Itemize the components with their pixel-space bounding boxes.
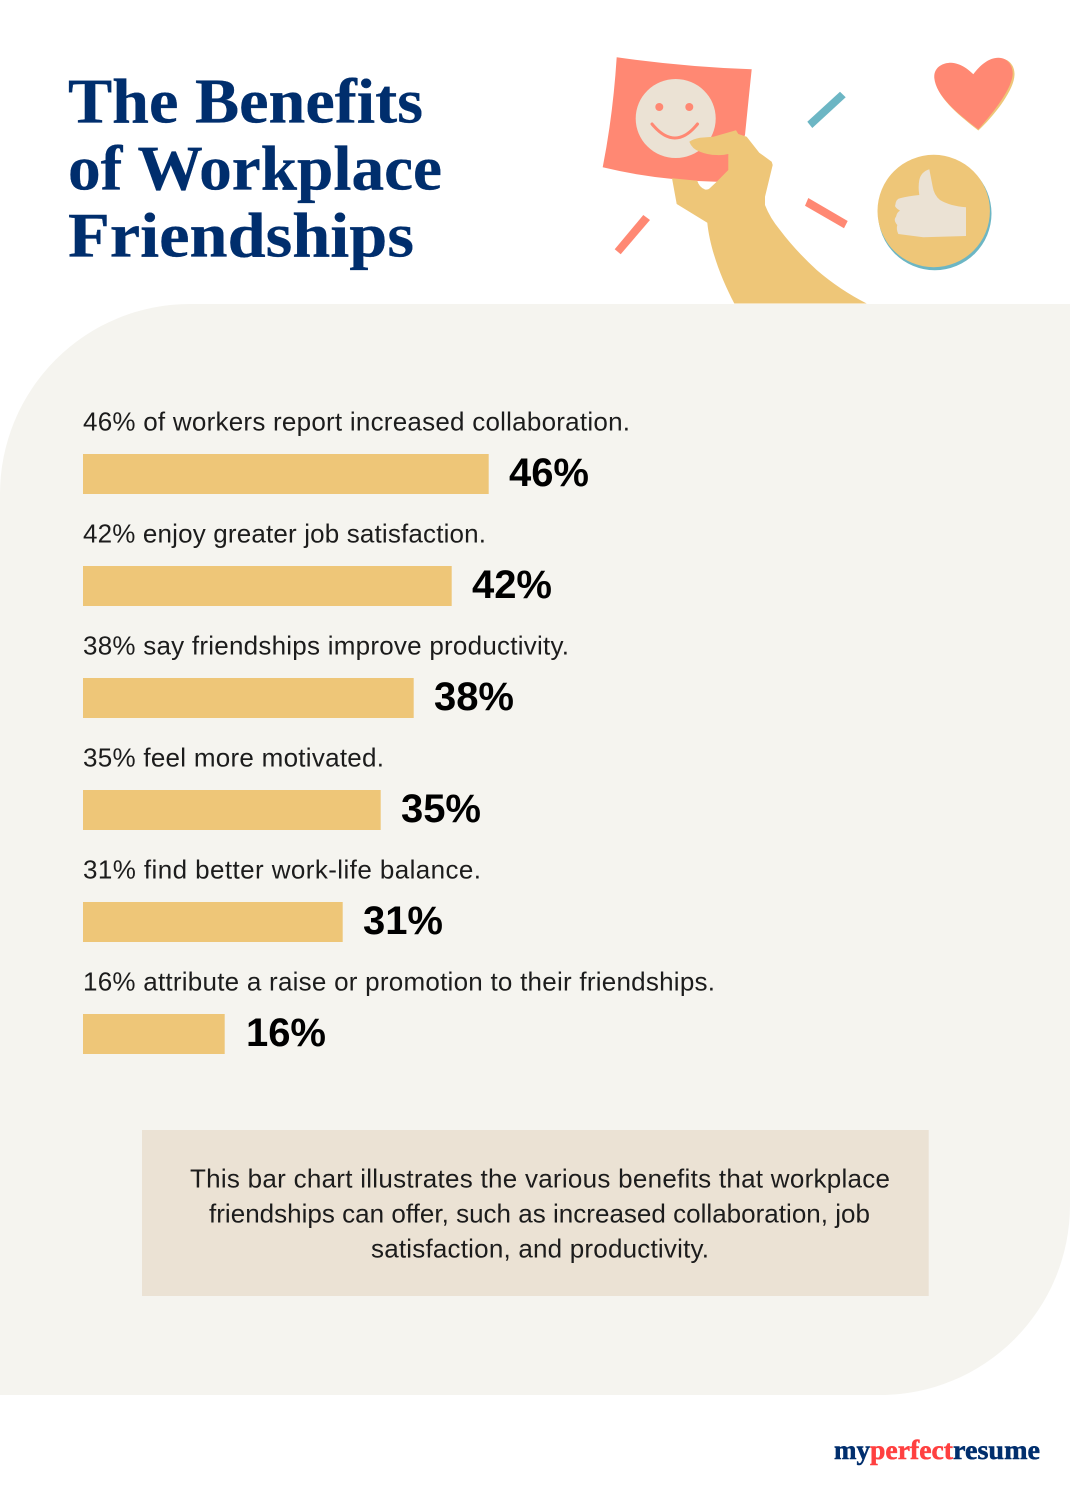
row: 16%: [83, 966, 715, 1055]
icon: hand: [672, 130, 867, 304]
title: [68, 66, 442, 270]
icon: smiley face: [636, 79, 716, 158]
row: 35%: 35%: [401, 787, 481, 831]
icon: salmon confetti right: [805, 198, 848, 228]
callout: satisfaction, and productivity.: [371, 1234, 709, 1264]
icon: thumbs up badge: [878, 155, 992, 270]
row: 42%: 42%: [472, 563, 552, 607]
row: 35%: [83, 742, 481, 831]
row: 46%: [83, 406, 630, 495]
callout: friendships can offer, such as increased collaboration, job: [209, 1198, 870, 1228]
row: 31%: 31% find better work-life balance.: [83, 854, 481, 884]
title: of Workplace: [68, 132, 442, 204]
icon: heart: [934, 58, 1015, 131]
row: 42%: [83, 518, 552, 607]
row: 38%: 38% say friendships improve productivity.: [83, 630, 569, 660]
callout: This bar chart illustrates the various benefits that workplace: [190, 1164, 890, 1194]
icon: salmon card: [603, 57, 752, 182]
row: 46%: 46% of workers report increased collaboration.: [83, 406, 630, 436]
logo: my: [834, 1435, 870, 1465]
icon: salmon confetti left: [615, 215, 650, 254]
callout: [142, 1130, 929, 1296]
row: 31%: 31%: [363, 899, 443, 943]
row: 38%: [83, 630, 569, 719]
row: 16%: 16% attribute a raise or promotion to their friendships.: [83, 966, 715, 996]
row: 46%: 46%: [509, 451, 589, 495]
row: 16%: 16%: [246, 1011, 326, 1055]
row: 42%: 42% enjoy greater job satisfaction.: [83, 518, 486, 548]
title: The Benefits: [68, 66, 423, 136]
row: 38%: 38%: [434, 675, 514, 719]
logo: [834, 1435, 1040, 1465]
illustration: hand holding smiley card: [603, 57, 867, 303]
title: Friendships: [68, 200, 414, 270]
logo: perfect: [870, 1435, 953, 1465]
background panel: [0, 304, 1070, 1395]
logo: resume: [953, 1435, 1040, 1465]
bar chart: [83, 406, 715, 1055]
icon: teal confetti: [807, 92, 846, 128]
row: 31%: [83, 854, 481, 943]
row: 35%: 35% feel more motivated.: [83, 742, 384, 772]
